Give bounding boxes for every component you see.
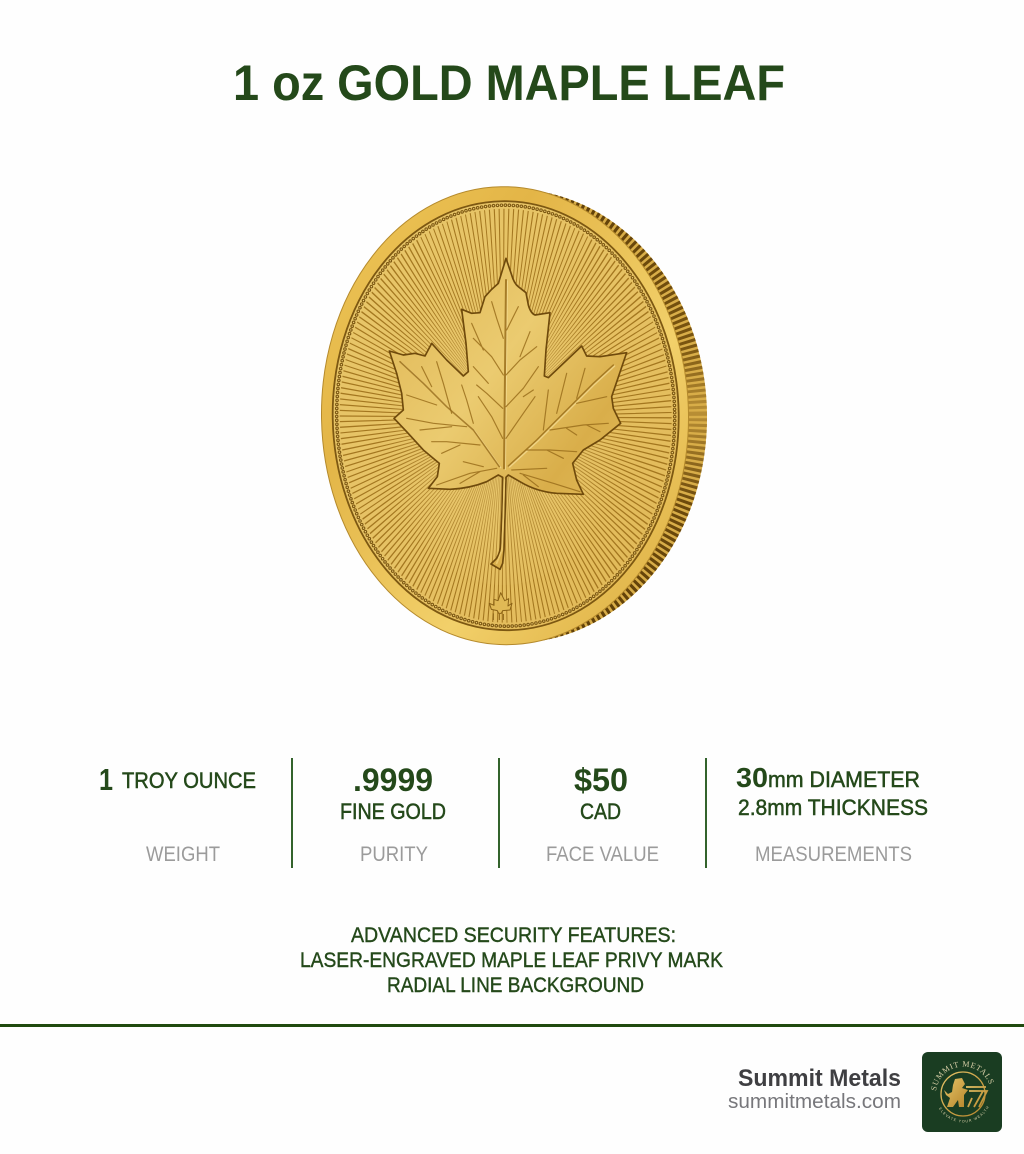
stat: face value: CAD (580, 799, 621, 824)
stat: purity: FINE GOLD (340, 799, 446, 824)
footer brand (728, 1052, 1002, 1132)
title: 1 oz GOLD MAPLE LEAF (233, 55, 785, 111)
lion emblem (944, 1078, 968, 1107)
coin reeded edge (544, 192, 707, 640)
stem highlight (497, 480, 504, 563)
beaded ring (333, 202, 678, 629)
stat: face value: FACE VALUE (546, 843, 659, 866)
specification panel (99, 758, 928, 868)
stat: purity (340, 762, 446, 866)
security features text (300, 924, 723, 997)
logo: ELEVATE YOUR WEALTH (939, 1106, 989, 1122)
stat: face value: $50 (574, 762, 628, 798)
logo: SUMMIT METALS (931, 1061, 994, 1090)
stat: weight (99, 762, 256, 866)
stat: measurements: mm DIAMETER (768, 767, 920, 792)
stat: measurements (736, 762, 928, 866)
stat: face value (546, 762, 659, 866)
maple leaf (389, 258, 627, 569)
stat: purity: .9999 (353, 762, 433, 798)
radial line background (380, 255, 626, 585)
logo (922, 1052, 1002, 1132)
security features text: LASER-ENGRAVED MAPLE LEAF PRIVY MARK (300, 949, 723, 972)
security features text: ADVANCED SECURITY FEATURES: (351, 924, 676, 947)
security features text: RADIAL LINE BACKGROUND (387, 974, 644, 997)
stat: purity: PURITY (360, 843, 428, 866)
stat: measurements: 2.8mm THICKNESS (738, 795, 928, 820)
brand url: summitmetals.com (728, 1091, 901, 1113)
stat: measurements: MEASUREMENTS (755, 843, 912, 866)
privy mark (489, 593, 512, 620)
coin rim (318, 184, 692, 648)
stat: weight: 1 (99, 762, 113, 797)
leaf outline (389, 258, 627, 569)
stripe emblem (966, 1087, 987, 1107)
leaf veins (400, 280, 613, 492)
brand name: Summit Metals (738, 1065, 901, 1092)
inner rim step (329, 198, 682, 633)
coin illustration (315, 184, 711, 648)
stat: weight: TROY OUNCE (122, 768, 256, 793)
leaf vein highlights (401, 281, 615, 469)
stat: measurements: 30 (736, 762, 768, 793)
stat: weight: WEIGHT (146, 843, 220, 866)
